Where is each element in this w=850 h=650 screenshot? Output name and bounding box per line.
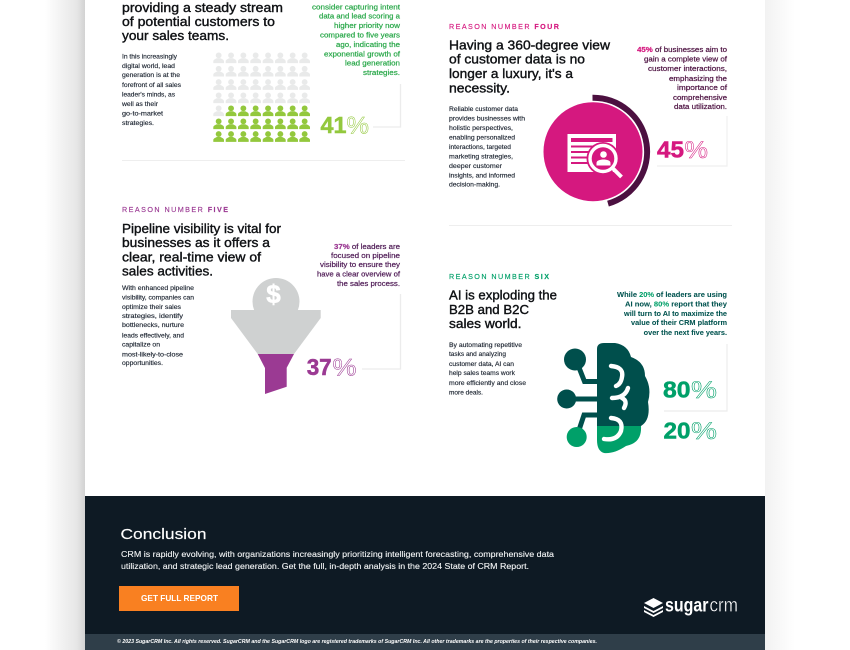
text block: customer data body: decision-making.: [449, 182, 500, 188]
button: get full report: GET FULL REPORT: [141, 593, 218, 603]
text block: lead generation body: digital world, lead: [122, 63, 175, 70]
legal bar: [85, 634, 765, 650]
callout: 41 percent text: data and lead scoring a: [319, 14, 400, 20]
text block: lead generation body: generation is at the: [122, 72, 180, 79]
chart: AI brain: [557, 343, 649, 453]
heading: lead generation: providing a steady stream: [122, 0, 283, 15]
statistic: 80 percent: 80: [663, 376, 690, 402]
statistic: 45 percent: %: [684, 137, 708, 164]
heading: AI: AI is exploding the: [449, 288, 557, 302]
heading: customer data: [449, 38, 611, 96]
text block: pipeline body: optimize their sales: [122, 304, 182, 311]
callout: 41 percent text: exponential growth of: [324, 51, 400, 58]
text block: lead generation body: well as their: [121, 101, 159, 108]
text block: customer data body: provides businesses with: [449, 116, 525, 122]
text block: pipeline body: visibility, companies can: [122, 294, 194, 301]
logo: sugarcrm: crm: [710, 596, 738, 617]
statistic: 37 percent: [307, 354, 356, 382]
callout: 41 percent text: higher priority now: [334, 23, 401, 30]
heading: pipeline visibility: Pipeline visibility is vital for: [122, 221, 282, 236]
callout: 41 percent text: compared to five years: [320, 32, 401, 39]
panel: conclusion footer: [85, 496, 765, 634]
text block: pipeline body: [122, 285, 194, 367]
statistic: 45 percent: 45: [657, 137, 684, 163]
callout: 45 percent text: gain a complete view of: [644, 56, 727, 64]
heading: AI: [449, 288, 557, 331]
statistic: 41 percent: %: [346, 112, 369, 140]
heading: lead generation: of potential customers to: [122, 14, 275, 29]
callout: AI text: value of their CRM platform: [631, 320, 727, 327]
callout: 41 percent text: strategies.: [363, 70, 400, 77]
callout: 45 percent text: importance of: [677, 85, 727, 92]
legal bar: © 2023 SugarCRM Inc. All rights reserved. SugarCRM and the SugarCRM logo are registered trademarks of SugarCRM Inc. All other trademarks are the properties of their respective companies.: [117, 638, 597, 645]
button: get full report: [119, 586, 239, 611]
callout: 37 percent text: 37% of leaders are: [334, 244, 400, 251]
label: reason number five: REASON NUMBER FIVE: [122, 205, 228, 214]
callout: AI text: over the next five years.: [644, 330, 727, 337]
callout: 37 percent text: focused on pipeline: [331, 253, 400, 260]
text block: lead generation body: strategies.: [122, 120, 154, 127]
label: reason number six: REASON NUMBER SIX: [449, 272, 549, 281]
callout: 45 percent text: 45% of businesses aim to: [637, 47, 727, 54]
text block: pipeline body: capitalize on: [122, 342, 160, 349]
callout: 37 percent text: the sales process.: [337, 281, 400, 288]
text block: AI body: tasks and analyzing: [449, 351, 506, 358]
heading: lead generation: [122, 0, 283, 43]
text block: lead generation body: forefront of all sales: [122, 82, 182, 89]
heading: lead generation: your sales teams.: [122, 28, 229, 43]
icon: dollar coin: $: [266, 279, 281, 309]
logo: sugarcrm: sugar: [665, 596, 709, 617]
text block: conclusion body: [121, 549, 554, 571]
heading: customer data: Having a 360-degree view: [449, 38, 611, 52]
icon: document with magnifier: [568, 134, 622, 177]
statistic: 80 percent: [663, 376, 717, 404]
section: reason five: [122, 205, 401, 394]
callout: 37 percent text: visibility to ensure they: [320, 262, 401, 269]
text block: lead generation body: leader's minds, as: [122, 91, 176, 98]
text block: pipeline body: bottlenecks, nurture: [122, 322, 184, 329]
heading: pipeline visibility: [122, 221, 282, 278]
callout: AI text: [617, 292, 727, 337]
text block: lead generation body: [121, 53, 182, 127]
text block: conclusion body: CRM is rapidly evolving, with organizations increasingly prioritizing intelligent forecasting, comprehensive data: [121, 549, 554, 559]
text block: customer data body: marketing strategies,: [449, 154, 513, 160]
heading: pipeline visibility: sales activities.: [122, 264, 213, 278]
section: reason six: [449, 272, 727, 453]
section: reason four: [449, 22, 727, 204]
callout: 41 percent text: consider capturing intent: [312, 4, 400, 12]
heading: pipeline visibility: businesses as it offers a: [122, 235, 271, 250]
text block: AI body: help sales teams work: [449, 370, 516, 377]
text block: customer data body: holistic perspectives,: [449, 125, 513, 132]
callout: 37 percent text: [317, 244, 401, 288]
statistic: 45 percent: [657, 137, 708, 164]
text block: pipeline body: most-likely-to-close: [122, 351, 183, 358]
statistic: 80 percent: %: [691, 377, 717, 404]
heading: pipeline visibility: clear, real-time view of: [122, 250, 261, 264]
heading: customer data: of customer data is no: [449, 52, 585, 67]
logo: sugarcrm: [644, 596, 738, 617]
heading: customer data: necessity.: [449, 80, 510, 96]
statistic: 41 percent: [320, 112, 369, 140]
statistic: 20 percent: %: [691, 418, 717, 445]
callout: 45 percent text: data utilization.: [674, 104, 727, 111]
callout: 45 percent text: comprehensive: [673, 95, 727, 102]
text block: pipeline body: leads effectively, and: [122, 332, 184, 339]
callout: 41 percent text: lead generation: [345, 60, 400, 68]
heading: customer data: longer a luxury, it's a: [449, 66, 574, 81]
callout: 45 percent text: customer interactions,: [648, 66, 727, 73]
callout: AI text: AI now, 80% report that they: [625, 302, 727, 308]
callout: AI text: While 20% of leaders are using: [617, 292, 727, 299]
text block: AI body: [449, 342, 526, 396]
statistic: 20 percent: [664, 418, 717, 445]
chart: 45 percent ring and icon: [544, 98, 647, 204]
callout: 41 percent text: [312, 4, 401, 77]
statistic: 37 percent: %: [332, 354, 356, 382]
text block: customer data body: deeper customer: [449, 163, 503, 170]
text block: pipeline body: With enhanced pipeline: [122, 285, 194, 292]
pictogram: 41 percent of people: [213, 52, 310, 142]
text block: lead generation body: go-to-market: [122, 110, 163, 117]
label: reason number four: REASON NUMBER FOUR: [449, 22, 560, 31]
text block: pipeline body: opportunities.: [122, 360, 163, 367]
text block: AI body: customer data, AI can: [449, 361, 514, 368]
statistic: 20 percent: 20: [664, 418, 690, 444]
text block: customer data body: Reliable customer data: [449, 106, 518, 113]
callout: 37 percent text: have a clear overview of: [317, 272, 400, 278]
callout: AI text: will turn to AI to maximize the: [623, 311, 727, 318]
statistic: 41 percent: 41: [320, 112, 347, 138]
text block: lead generation body: In this increasingly: [122, 53, 178, 60]
heading: conclusion: Conclusion: [120, 526, 206, 543]
text block: AI body: more deals.: [449, 390, 483, 396]
section: reason three: [121, 0, 401, 142]
statistic: 37 percent: 37: [307, 354, 332, 380]
text block: customer data body: [449, 106, 525, 188]
callout: 45 percent text: [637, 47, 727, 111]
callout: 41 percent text: ago, indicating the: [336, 42, 400, 49]
chart: funnel with dollar coin: [231, 278, 321, 394]
heading: AI: sales world.: [449, 316, 522, 331]
heading: AI: B2B and B2C: [449, 302, 529, 317]
text block: AI body: By automating repetitive: [449, 342, 522, 349]
text block: AI body: more efficiently and close: [449, 380, 526, 387]
text block: customer data body: enabling personalized: [449, 134, 515, 142]
text block: conclusion body: utilization, and strategic lead generation. Get the full, in-depth analysis in the 2024 State of CRM Report.: [121, 561, 529, 571]
callout: 45 percent text: emphasizing the: [669, 76, 727, 83]
text block: customer data body: insights, and informed: [449, 172, 515, 180]
text block: pipeline body: strategies, identify: [122, 313, 184, 320]
text block: customer data body: interactions, targeted: [449, 144, 511, 151]
